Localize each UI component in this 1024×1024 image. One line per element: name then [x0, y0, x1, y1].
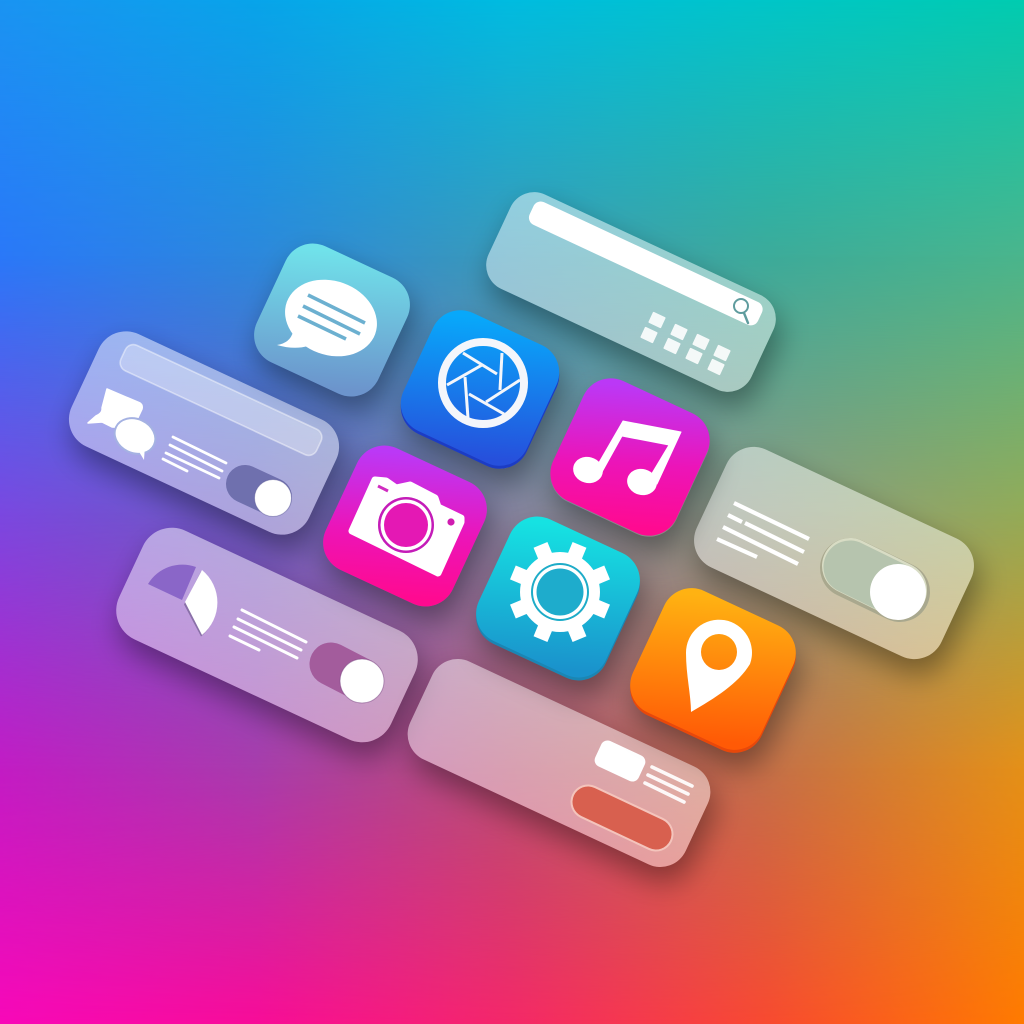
panel: search card	[478, 184, 784, 400]
toggle switch	[245, 480, 292, 516]
aperture glyph	[442, 342, 524, 424]
pie chart	[148, 565, 217, 636]
speech glyph	[274, 267, 388, 369]
search bar	[526, 199, 765, 328]
empty pill slot	[588, 802, 656, 834]
panel: chat card	[59, 321, 349, 545]
panel: toggle card	[684, 437, 984, 669]
toggle switch	[331, 659, 384, 703]
pin glyph	[686, 620, 752, 712]
camera glyph	[352, 480, 461, 573]
text lines	[645, 767, 692, 802]
tag button	[592, 738, 648, 784]
icon tile: music	[540, 368, 720, 547]
music note glyph	[570, 421, 681, 498]
toggle switch	[850, 564, 926, 620]
icon tile: speech bubble	[244, 234, 420, 406]
icon tile: location pin	[620, 578, 806, 763]
icon tile: aperture	[391, 300, 569, 479]
text lines	[163, 437, 226, 478]
keypad grid	[640, 312, 731, 375]
icon tile: gear	[466, 507, 650, 690]
input field	[117, 342, 325, 458]
icon tile: camera	[313, 436, 497, 616]
icon: magnifier	[734, 299, 748, 323]
gear glyph	[510, 542, 610, 642]
text lines	[230, 610, 306, 658]
panel: bottom card	[398, 650, 720, 876]
panel: pie chart card	[106, 517, 428, 753]
text lines	[717, 503, 809, 564]
icon: chat bubbles	[88, 389, 161, 460]
